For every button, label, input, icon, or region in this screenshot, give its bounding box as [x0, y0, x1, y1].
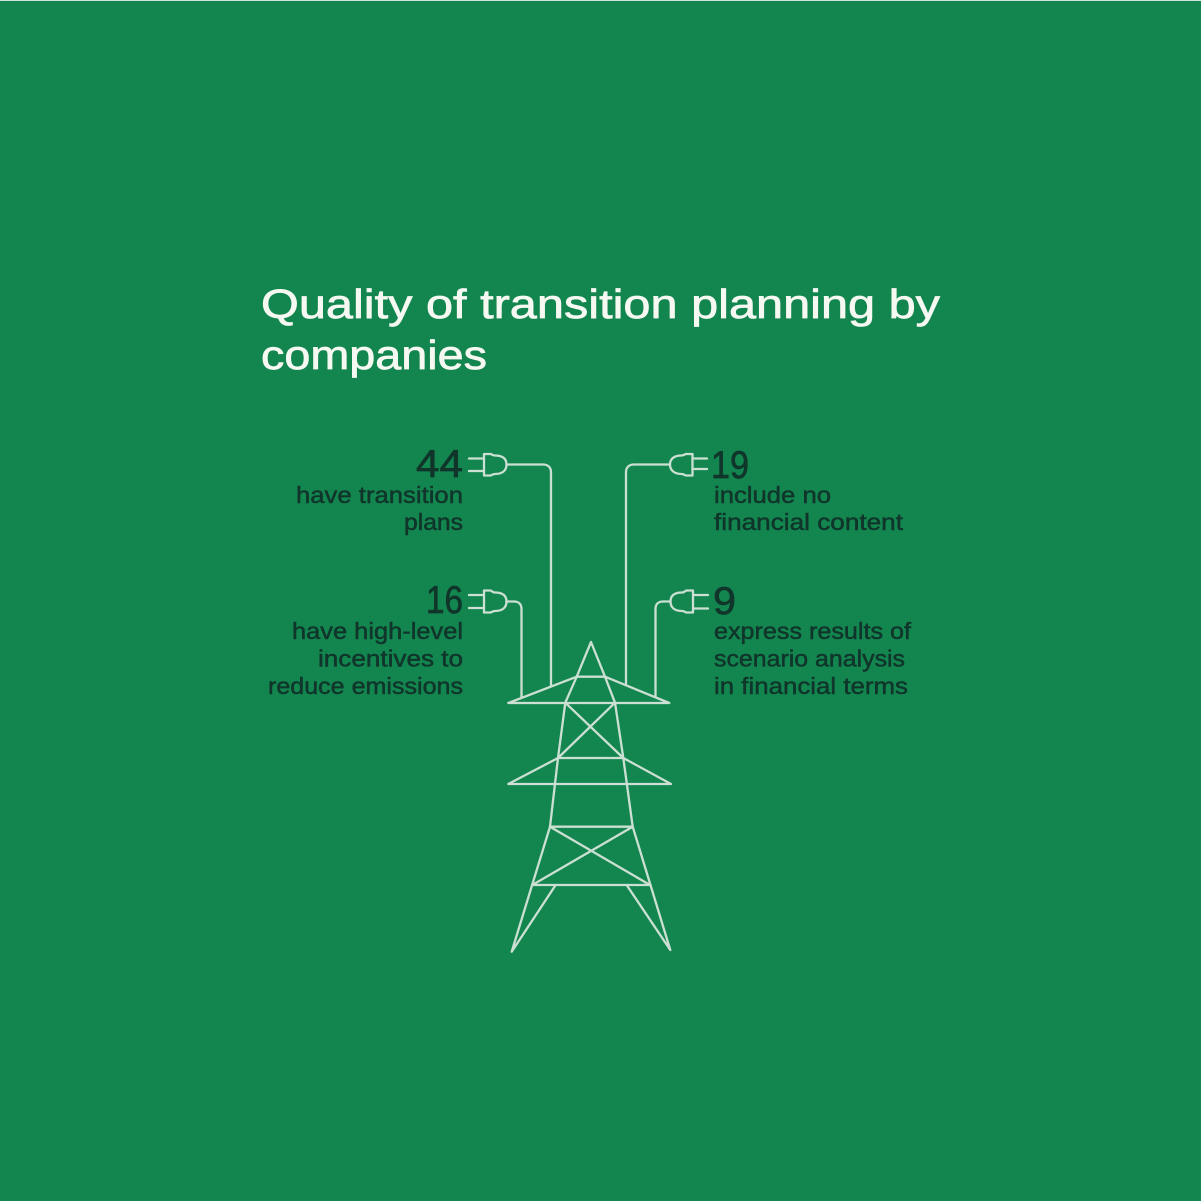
icon: plug and cable 9 — [656, 590, 708, 697]
label: include no financial content — [714, 482, 904, 535]
stat: 16 have high-level incentives — [268, 579, 463, 699]
stat: 19 include no financial content — [711, 444, 904, 535]
icon: transmission tower — [508, 642, 671, 952]
label: express results of scenario analysis in financial terms — [714, 618, 912, 699]
label: have high-level incentives to reduce emissions — [268, 618, 463, 699]
label: express results of scenario analysis in financial terms: express results of — [714, 618, 912, 644]
title: Quality of transition planning by — [261, 281, 941, 327]
label: have transition plans: have transition — [296, 482, 463, 508]
number: 16: 16 — [426, 579, 463, 622]
label: have transition plans — [296, 482, 463, 535]
icon: plug and cable 19 — [626, 454, 707, 685]
label: have transition plans: plans — [404, 509, 463, 535]
title — [261, 281, 941, 378]
label: include no financial content: financial content — [714, 509, 904, 535]
label: have high-level incentives to reduce emissions: reduce emissions — [268, 673, 463, 699]
number: 19: 19 — [711, 444, 749, 487]
number: 44: 44 — [416, 443, 463, 486]
label: express results of scenario analysis in financial terms: scenario analysis — [714, 646, 905, 672]
label: include no financial content: include no — [714, 482, 831, 508]
stat: 44 have transition plans — [296, 443, 463, 535]
label: express results of scenario analysis in financial terms: in financial terms — [714, 673, 908, 699]
stat: 9 express results — [713, 580, 912, 699]
label: have high-level incentives to reduce emissions: incentives to — [318, 646, 463, 672]
number: 9: 9 — [713, 580, 736, 623]
icon: plug and cable 44 — [469, 454, 551, 686]
title: companies — [261, 332, 487, 378]
icon: plug and cable 16 — [469, 590, 522, 697]
label: have high-level incentives to reduce emissions: have high-level — [292, 618, 463, 644]
